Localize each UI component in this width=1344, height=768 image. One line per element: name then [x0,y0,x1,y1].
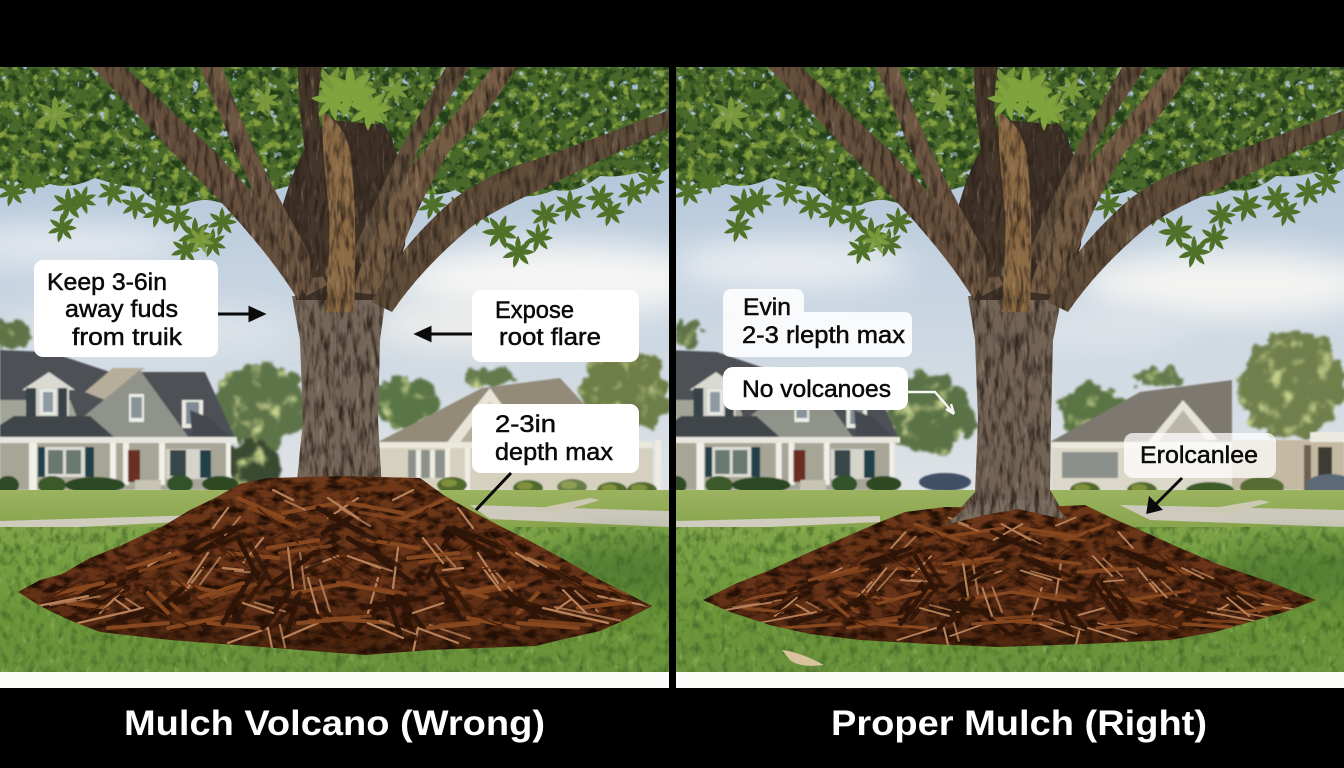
far lawn and sidewalk [0,490,669,531]
tree trunk with root flare [961,296,1060,508]
house: right [378,378,661,498]
pointer: depth to mulch [476,473,511,510]
callout: depth max: depth max [495,439,613,466]
callout: keep away from trunk [34,260,218,357]
trunk base over mulch [945,500,1068,525]
callout: keep away from trunk: Keep 3-6in [47,269,167,296]
sky [0,67,720,497]
callout: depth max, right panel: 2-3 rlepth max [742,322,905,349]
lawn shadow [540,540,720,600]
house: left [0,350,238,494]
panel: proper mulch (right) [665,67,1344,672]
branches [92,67,669,312]
house: left [665,350,901,494]
top leaf cluster [311,67,389,131]
fallen leaf [782,650,824,666]
tree crown: right [673,61,1344,312]
tree crown: left [0,61,669,312]
panel: mulch volcano (wrong) [0,67,720,672]
heading: left: Mulch Volcano (Wrong) [124,704,545,743]
arrow: left to trunk [417,328,472,340]
heading: right: Proper Mulch (Right) [831,704,1207,743]
callout: keep away from trunk: from truik [72,324,183,351]
mulch pile: proper [703,505,1316,647]
branches [768,67,1344,312]
white strip: right [676,672,1344,688]
leaf mass and clusters [673,61,1344,269]
callout: mulch label: Erolcanlee [1140,442,1258,469]
background trees [0,321,669,489]
mulch pile: volcano [18,476,652,655]
near lawn [676,527,1344,672]
sky [670,67,1344,497]
callout: expose root flare: Expose [495,297,574,324]
callout: keep away from trunk: away fuds [65,296,178,323]
callout: expose root flare [472,290,639,362]
callout: depth max [472,404,639,473]
car [919,473,971,491]
background trees [674,318,1344,457]
tree trunk [292,296,386,492]
arrow: right to trunk [218,308,263,320]
top leaf cluster [987,67,1065,131]
leaf mass and clusters [0,61,669,269]
far lawn and sidewalk [676,490,1344,531]
lawn shadow [1210,544,1344,600]
callout: no volcanoes: No volcanoes [742,376,891,403]
white strip: left [0,672,669,688]
callout: depth max, right panel [723,289,912,357]
arrow: label to mulch [1148,478,1182,512]
callout: no volcanoes [723,367,908,410]
arrow: no volcanoes to trunk [908,392,954,414]
callout: mulch label [1124,433,1276,478]
house: right [1050,380,1344,498]
near lawn [0,527,669,672]
callout: expose root flare: root flare [499,324,601,351]
callout: depth max: 2-3in [495,411,556,438]
callout: depth max, right panel: Evin [743,294,791,321]
